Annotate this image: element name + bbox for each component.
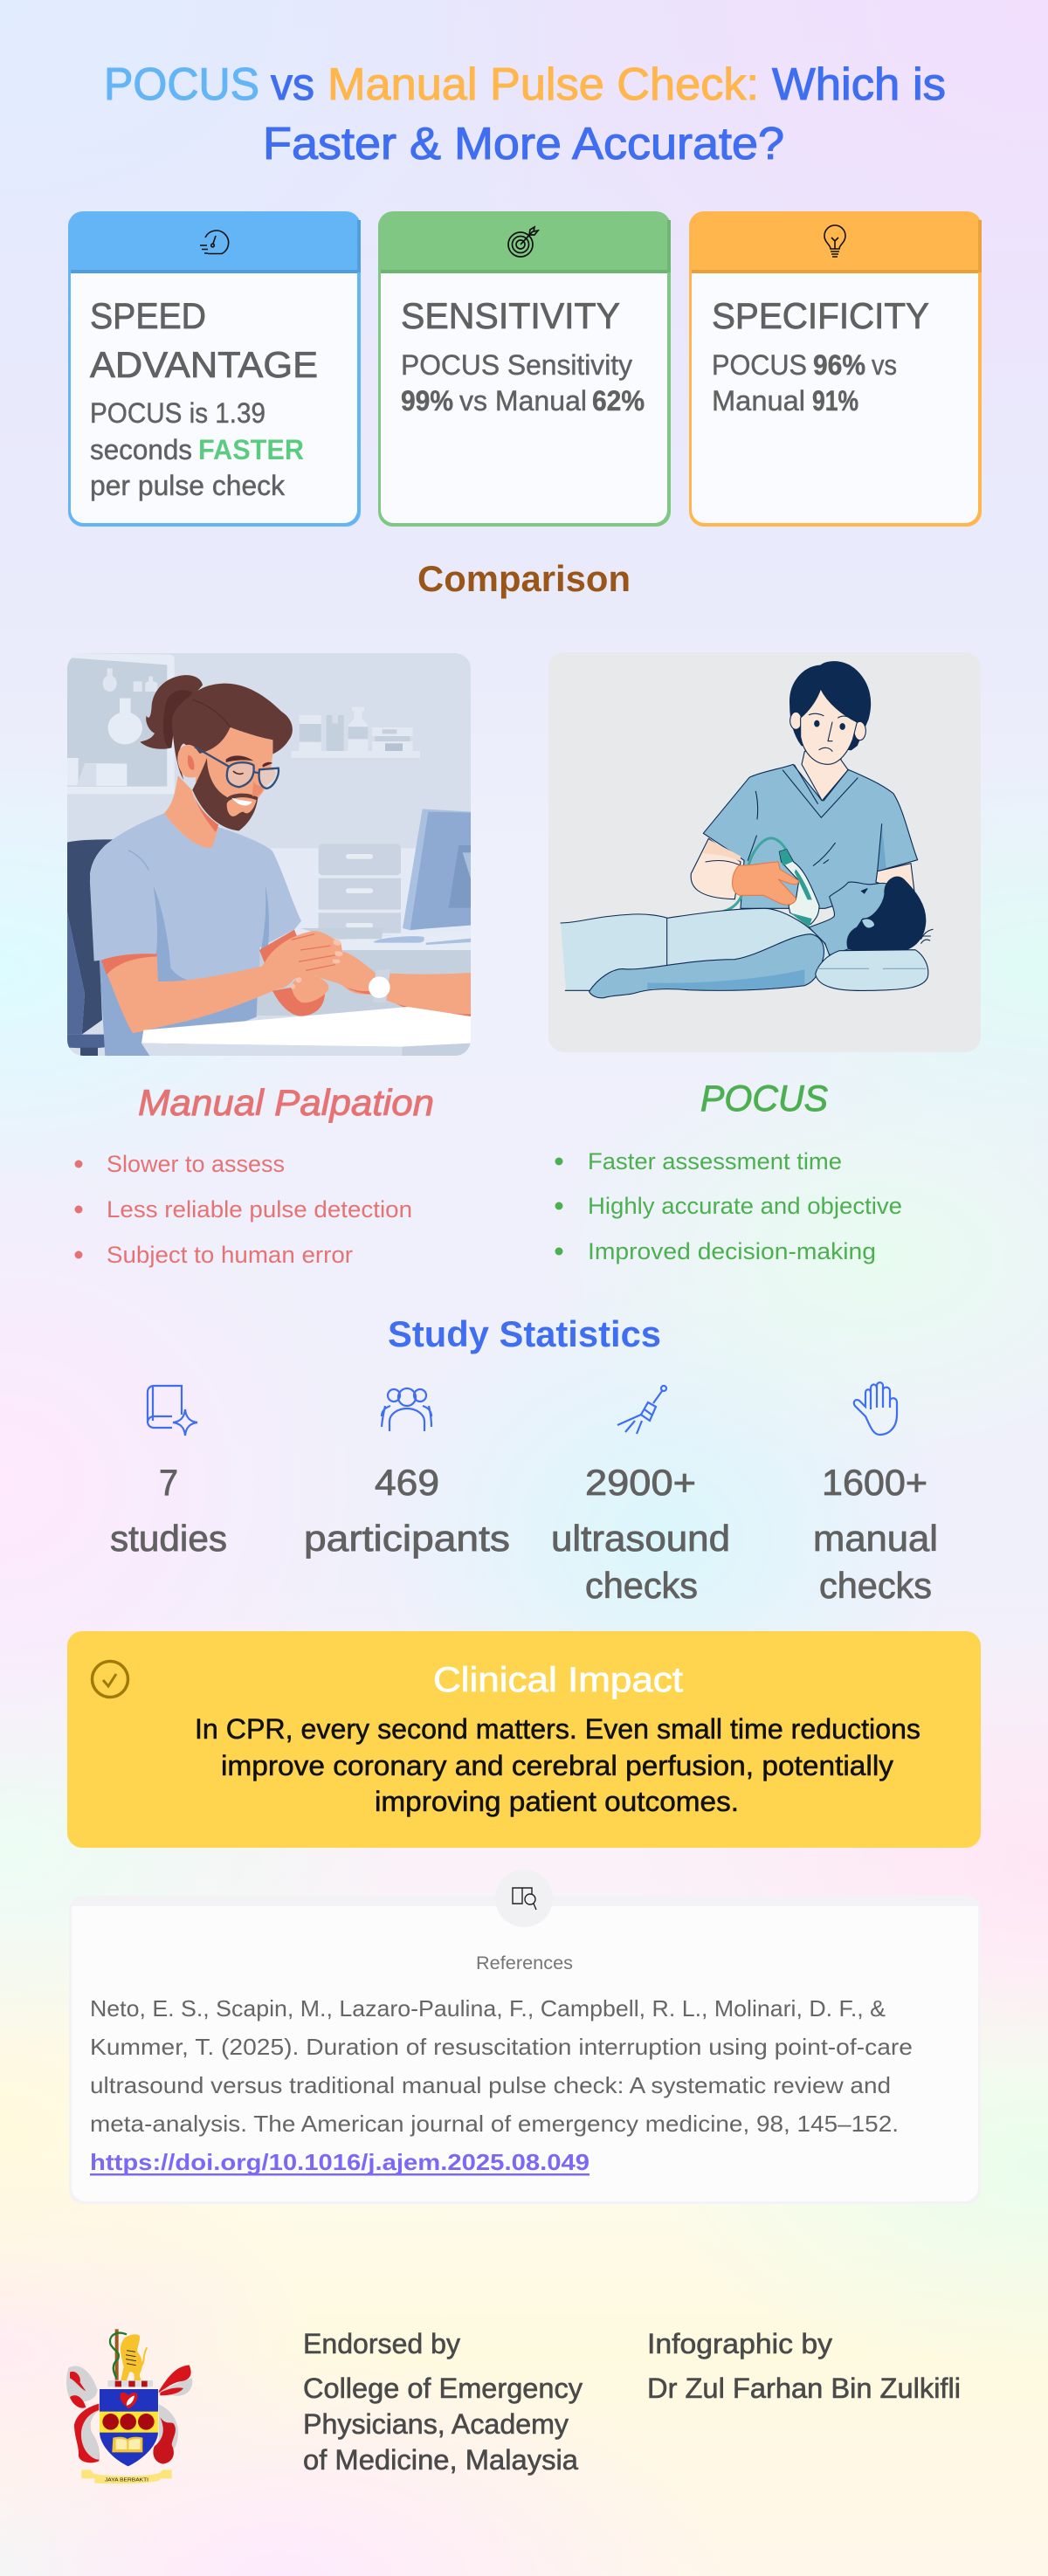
list: POCUS points: Highly accurate and objective bbox=[588, 1193, 902, 1219]
wall board bbox=[67, 653, 175, 794]
text: sensitivity values bbox=[401, 349, 645, 417]
monitor bbox=[403, 809, 471, 930]
shelf bbox=[292, 751, 420, 758]
tiger bbox=[121, 2334, 142, 2380]
glove bbox=[733, 862, 799, 905]
text: speed advantage detail: seconds bbox=[90, 434, 192, 465]
list: POCUS points: Improved decision-making bbox=[588, 1238, 876, 1264]
patient arm bbox=[590, 934, 824, 998]
label: manual checks: checks bbox=[819, 1565, 932, 1606]
mantling right bbox=[159, 2378, 192, 2396]
patient hair bbox=[847, 877, 926, 953]
text: citation: Neto, E. S., Scapin, M., Lazaro-Paulina, F., Campbell, R. L., Molinari, D. F., & bbox=[90, 1995, 886, 2022]
text: citation bbox=[90, 1995, 913, 2137]
heading: study statistics: Study Statistics bbox=[388, 1313, 661, 1354]
ear bbox=[177, 745, 200, 777]
logo: college crest bbox=[66, 2329, 192, 2483]
shield bbox=[100, 2389, 158, 2466]
list: POCUS points: Faster assessment time bbox=[588, 1148, 842, 1174]
patient arm bbox=[316, 952, 471, 1017]
logo: college crest: JAYA BERBAKTI bbox=[105, 2478, 148, 2483]
icon: check circle bbox=[93, 1661, 128, 1698]
ears bbox=[790, 712, 865, 740]
label: manual checks bbox=[813, 1518, 938, 1606]
ponytail bbox=[140, 675, 203, 749]
hair bbox=[172, 684, 293, 780]
title: Manual Pulse Check: bbox=[328, 59, 759, 110]
lower hand bbox=[272, 988, 325, 1016]
eyebrows bbox=[226, 755, 272, 768]
title: vs bbox=[271, 59, 314, 110]
doctor upper arm bbox=[101, 954, 279, 1033]
label: studies: studies bbox=[110, 1518, 227, 1559]
list: manual palpation points: Less reliable pulse detection bbox=[107, 1196, 412, 1223]
text: endorsed by: Endorsed by bbox=[303, 2328, 460, 2359]
face bbox=[196, 727, 276, 799]
icon: people bbox=[382, 1388, 431, 1431]
text: clinical impact body: In CPR, every second matters. Even small time reductions bbox=[195, 1713, 920, 1745]
doctor face bbox=[801, 689, 857, 764]
mantling left bbox=[66, 2366, 98, 2402]
label: ultrasound checks bbox=[551, 1518, 730, 1606]
title bbox=[104, 59, 946, 169]
text: specificity values: 96% bbox=[813, 349, 865, 381]
panel: clinical impact bbox=[67, 1631, 981, 1848]
stat: ultrasound checks bbox=[551, 1386, 730, 1606]
text: clinical impact body: improving patient outcomes. bbox=[375, 1786, 739, 1817]
torso lower bbox=[100, 954, 257, 1056]
illustration: manual palpation doctor bbox=[67, 653, 471, 1057]
text: sensitivity values: vs Manual bbox=[459, 385, 587, 417]
scrubs bbox=[703, 764, 918, 908]
text: speed advantage detail bbox=[90, 397, 304, 501]
label: manual checks: manual bbox=[813, 1518, 938, 1559]
heading: speed advantage bbox=[90, 295, 318, 385]
text: specificity values: Manual bbox=[712, 385, 805, 417]
chair bbox=[67, 839, 114, 1035]
patient neck and face bbox=[809, 882, 898, 955]
link: doi: https://doi.org/10.1016/j.ajem.2025.08.049 bbox=[90, 2149, 590, 2175]
text: citation: Kummer, T. (2025). Duration of resuscitation interruption using point-of-care bbox=[90, 2034, 913, 2060]
text: endorsed by: College of Emergency bbox=[303, 2373, 583, 2404]
text: specificity values: vs bbox=[872, 349, 897, 381]
heading: comparison: Comparison bbox=[417, 558, 631, 599]
watch bbox=[376, 973, 390, 1001]
icon: hand bbox=[854, 1382, 897, 1435]
number: 2900+: 2900+ bbox=[585, 1462, 696, 1503]
blanket bbox=[561, 908, 830, 990]
shirt bbox=[90, 813, 301, 981]
heading: sensitivity: SENSITIVITY bbox=[401, 295, 620, 336]
text: speed advantage detail: FASTER bbox=[198, 434, 304, 465]
heading: references: References bbox=[476, 1953, 573, 1973]
staff bbox=[115, 2329, 119, 2380]
doctor hair bbox=[790, 662, 871, 750]
snake bbox=[110, 2333, 127, 2378]
panel: sensitivity card bbox=[378, 211, 671, 527]
label: ultrasound checks: checks bbox=[585, 1565, 698, 1606]
text: clinical impact body: improve coronary and cerebral perfusion, potentially bbox=[221, 1750, 893, 1781]
doctor hand bbox=[261, 931, 344, 989]
heading: manual palpation: Manual Palpation bbox=[138, 1082, 434, 1123]
text: speed advantage detail: per pulse check bbox=[90, 470, 286, 501]
panel: specificity card bbox=[689, 211, 982, 527]
number: 469: 469 bbox=[375, 1462, 439, 1503]
text: endorsed by: Physicians, Academy bbox=[303, 2408, 569, 2440]
text: specificity values: 91% bbox=[812, 385, 858, 417]
heading: clinical impact: Clinical Impact bbox=[433, 1661, 683, 1699]
face details bbox=[809, 713, 852, 751]
ultrasound cable bbox=[723, 838, 789, 912]
panel: references bbox=[69, 1870, 981, 2204]
text: specificity values bbox=[712, 349, 897, 417]
wreath bbox=[107, 2380, 153, 2387]
text: citation: ultrasound versus traditional manual pulse check: A systematic review and bbox=[90, 2072, 891, 2098]
text: sensitivity values: POCUS Sensitivity bbox=[401, 349, 632, 381]
probe bbox=[779, 850, 819, 925]
pillow bbox=[816, 950, 928, 990]
text: sensitivity values: 99% bbox=[401, 385, 453, 417]
icon: book with sparkle bbox=[148, 1386, 197, 1436]
text: infographic by: Infographic by bbox=[647, 2328, 832, 2359]
list: manual palpation points: Slower to assess bbox=[107, 1151, 285, 1177]
heading: specificity: SPECIFICITY bbox=[712, 295, 929, 336]
panel: speed advantage card bbox=[68, 211, 361, 527]
heading: speed advantage: SPEED bbox=[90, 295, 206, 336]
stat: manual checks bbox=[813, 1382, 938, 1606]
heading: POCUS: POCUS bbox=[700, 1078, 828, 1119]
text: endorsed by: of Medicine, Malaysia bbox=[303, 2444, 578, 2476]
neck bbox=[164, 775, 218, 848]
title: Which is bbox=[772, 59, 946, 110]
label: ultrasound checks: ultrasound bbox=[551, 1518, 730, 1559]
glasses bbox=[195, 747, 279, 789]
text: clinical impact body bbox=[195, 1713, 920, 1817]
beard bbox=[192, 758, 258, 830]
text: endorsed by bbox=[303, 2328, 583, 2476]
number: 7: 7 bbox=[159, 1462, 178, 1503]
illustration: POCUS doctor and patient bbox=[548, 652, 981, 1052]
text: infographic by: Dr Zul Farhan Bin Zulkifli bbox=[647, 2373, 961, 2404]
label: participants: participants bbox=[304, 1518, 510, 1559]
doctor arm bbox=[691, 838, 741, 899]
neck bbox=[802, 751, 848, 801]
back desk bbox=[339, 936, 471, 950]
front desk bbox=[141, 1007, 471, 1047]
text: infographic by bbox=[647, 2328, 961, 2404]
list: manual palpation points bbox=[75, 1151, 412, 1268]
number: 1600+: 1600+ bbox=[822, 1462, 927, 1503]
stat: studies bbox=[110, 1386, 227, 1559]
icon: ultrasound probe bbox=[617, 1386, 666, 1434]
text: speed advantage detail: POCUS is 1.39 bbox=[90, 397, 265, 429]
motto scroll bbox=[81, 2469, 172, 2483]
list: POCUS points bbox=[555, 1148, 902, 1264]
title: POCUS bbox=[104, 59, 259, 110]
text: citation: meta-analysis. The American journal of emergency medicine, 98, 145–152. bbox=[90, 2111, 899, 2137]
icon: light bulb bbox=[824, 225, 845, 257]
text: sensitivity values: 62% bbox=[592, 385, 645, 417]
list: manual palpation points: Subject to human error bbox=[107, 1242, 353, 1268]
heading: speed advantage: ADVANTAGE bbox=[90, 344, 318, 385]
far arm bbox=[876, 864, 914, 894]
text: specificity values: POCUS bbox=[712, 349, 807, 381]
lower wall and cabinet bbox=[271, 848, 471, 935]
icon: target bbox=[508, 227, 538, 257]
title: Faster & More Accurate? bbox=[263, 119, 784, 169]
stat: participants bbox=[304, 1388, 510, 1559]
icon: speedometer bbox=[200, 231, 229, 253]
icon: book search badge bbox=[495, 1870, 553, 1927]
